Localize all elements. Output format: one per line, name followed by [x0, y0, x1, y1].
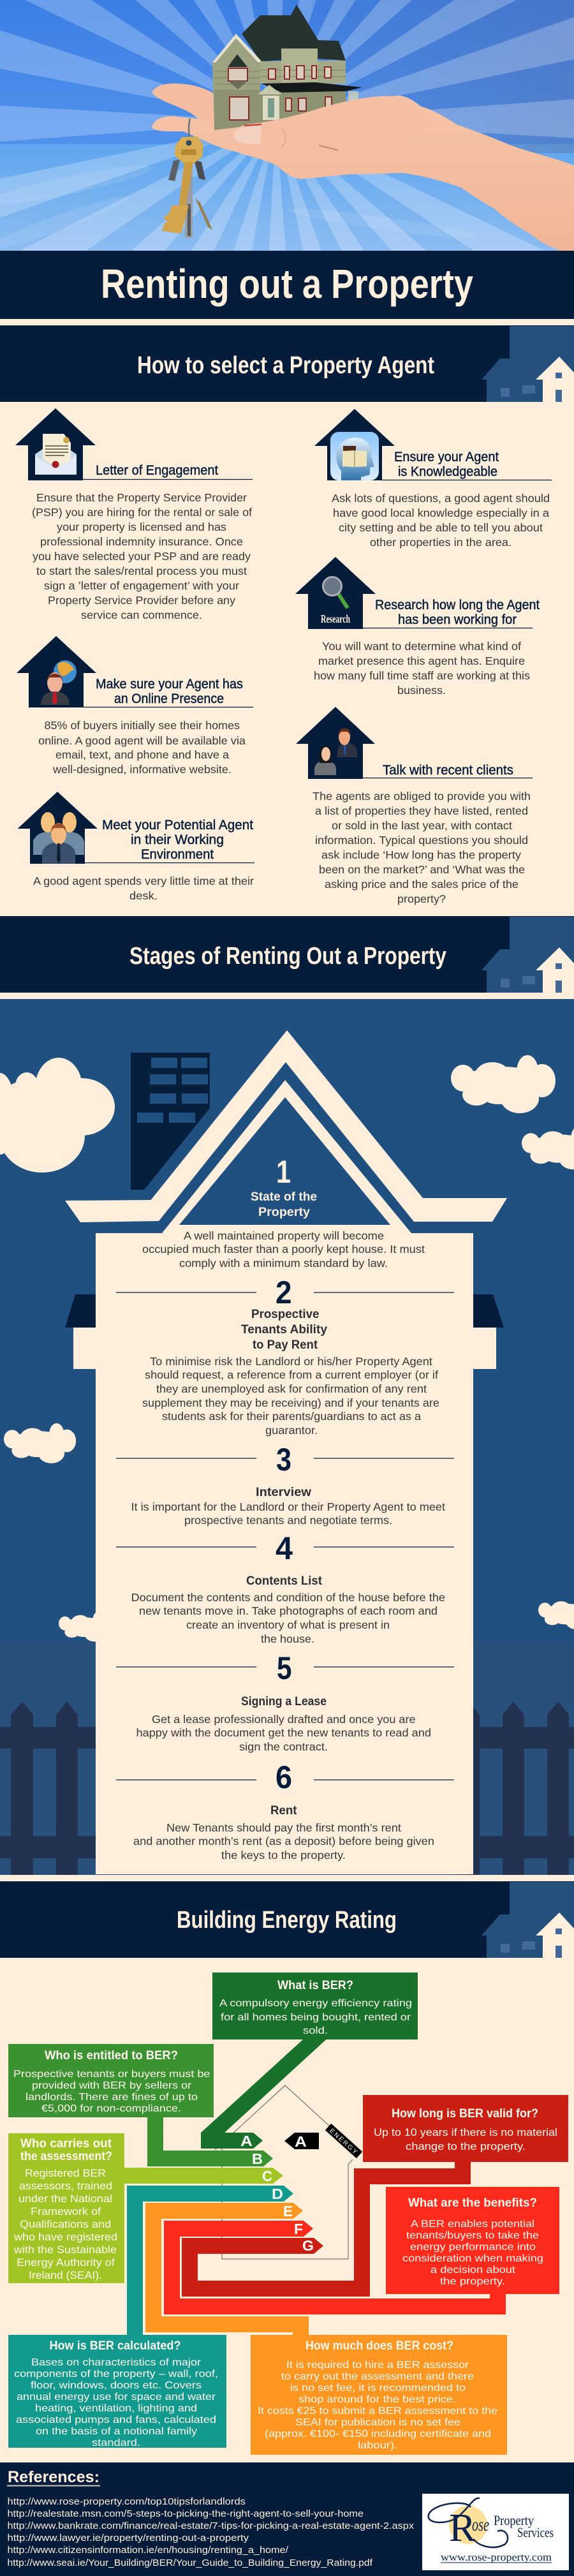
- heading: Research how long the Agent: [375, 598, 540, 612]
- text block: [314, 640, 530, 697]
- logo: Rose Property Services: ose: [472, 2514, 489, 2535]
- callout: how is BER calculated: components of the property – wall, roof,: [14, 2369, 218, 2380]
- text block: 85% of buyers initially see their homes: [45, 719, 240, 732]
- icon: three agents: [18, 792, 98, 864]
- band C: [124, 2168, 283, 2184]
- stage text: Get a lease professionally drafted and once you are: [152, 1713, 416, 1726]
- reference links: http://www.lawyer.ie/property/renting-out-a-property: [8, 2533, 249, 2543]
- icon: two clients: [296, 707, 375, 779]
- callout: how much does BER cost: SEAI for publication is no set fee: [295, 2417, 460, 2428]
- heading: Letter of Engagement: [96, 463, 218, 478]
- callout: what is BER: for all homes being bought, rented or: [221, 2012, 411, 2023]
- stage text: and another month’s rent (as a deposit) before being given: [133, 1835, 434, 1847]
- text block: sign a ’letter of engagement’ with your: [44, 579, 239, 592]
- stage 6: [116, 1759, 454, 1862]
- callout: how is BER calculated: annual energy use for space and water: [17, 2392, 216, 2402]
- band G: [182, 2162, 471, 2297]
- number: 5: [277, 1650, 292, 1686]
- callout: who carries out the assessment: with the Sustainable: [13, 2244, 117, 2256]
- stage heading: Property: [258, 1206, 310, 1219]
- icon: model house: [212, 4, 362, 130]
- heading: has been working for: [398, 612, 517, 627]
- stage text: To minimise risk the Landlord or his/her Property Agent: [150, 1355, 432, 1368]
- callout: who is entitled to BER: provided with BER by sellers or: [32, 2080, 192, 2091]
- stage text: prospective tenants and negotiate terms.: [184, 1514, 392, 1527]
- stage text: the keys to the property.: [221, 1849, 346, 1862]
- references heading: References:: [8, 2468, 99, 2486]
- black rating arrow: A: [295, 2133, 307, 2150]
- stage heading: Prospective: [251, 1308, 319, 1321]
- reference links: http://realestate.msn.com/5-steps-to-picking-the-right-agent-to-sell-your-home: [8, 2509, 364, 2519]
- stage text: New Tenants should pay the first month’s rent: [166, 1821, 401, 1834]
- panel: letter of engagement: [15, 408, 253, 621]
- callout: who is entitled to BER: €5,000 for non-compliance.: [41, 2103, 181, 2114]
- stage 2: [116, 1275, 454, 1437]
- number: 6: [276, 1759, 292, 1795]
- stage text: happy with the document get the new tenants to read and: [136, 1726, 431, 1739]
- background tower block: [131, 1053, 210, 1190]
- callout: what are the benefits: energy performance into: [410, 2242, 536, 2253]
- callout: who carries out the assessment: under the National: [18, 2193, 112, 2205]
- panel: ensure your agent is knowledgeable: [314, 409, 552, 549]
- panel: online presence: [17, 636, 253, 776]
- icon: bunch of keys: [162, 119, 212, 238]
- callout: who is entitled to BER: [8, 2044, 214, 2117]
- callout: how is BER calculated: Bases on characteristics of major: [31, 2357, 202, 2368]
- stage text: [142, 1229, 425, 1269]
- band D: D: [272, 2186, 283, 2202]
- reference links: http://www.rose-property.com/top10tipsforlandlords: [8, 2497, 246, 2507]
- heading: Meet your Potential Agent: [102, 818, 253, 833]
- callout: who is entitled to BER: Who is entitled to BER?: [45, 2049, 178, 2062]
- band F: [164, 2221, 506, 2314]
- text block: business.: [397, 684, 446, 697]
- stage heading: [251, 1190, 317, 1219]
- panel: references: [0, 2462, 574, 2576]
- fence: [0, 1701, 574, 1875]
- stage text: occupied much faster than a poorly kept house. It must: [142, 1243, 425, 1255]
- callout: who carries out the assessment: Energy Authority of: [17, 2256, 115, 2269]
- callout: how much does BER cost: to carry out the assessment and there: [281, 2371, 474, 2382]
- text block: service can commence.: [81, 609, 202, 621]
- heading: [382, 450, 552, 480]
- icon: hand: [152, 84, 574, 251]
- cloud: low left: [59, 1611, 113, 1641]
- callout: how is BER calculated: floor, windows, doors etc. Covers: [31, 2380, 202, 2391]
- stage text: the house.: [261, 1632, 314, 1645]
- band C: C: [262, 2168, 272, 2184]
- heading: Stages of Renting Out a Property: [129, 943, 446, 970]
- stage heading: Contents List: [246, 1574, 323, 1588]
- text block: [38, 719, 246, 776]
- logo: Rose Property Services: R: [449, 2506, 476, 2550]
- text block: desk.: [129, 889, 158, 902]
- scene background: [0, 999, 574, 1875]
- callout: what are the benefits: consideration when making: [402, 2253, 543, 2264]
- title banner: [0, 251, 574, 319]
- callout: how is BER calculated: on the basis of a notional family: [36, 2426, 197, 2437]
- icon: magnifying glass: [295, 557, 376, 629]
- stage text: guarantor.: [265, 1424, 318, 1437]
- text block: have good local knowledge especially in a: [333, 507, 549, 519]
- text block: property?: [397, 892, 446, 905]
- band D: [127, 2186, 293, 2335]
- house outline: [215, 2085, 353, 2259]
- callout: who carries out the assessment: Who carries out: [20, 2137, 112, 2150]
- section banner: building energy rating: [0, 1881, 574, 1958]
- text block: other properties in the area.: [370, 536, 511, 549]
- reference links: [8, 2497, 415, 2568]
- stage heading: Signing a Lease: [241, 1695, 327, 1708]
- icon: letter in envelope: [15, 408, 96, 480]
- reference links: http://www.citizensinformation.ie/en/housing/renting_a_home/: [8, 2545, 289, 2556]
- callout: what is BER: sold.: [303, 2025, 328, 2036]
- band A: A: [240, 2133, 253, 2149]
- section banner: stages of renting: [0, 916, 574, 993]
- band F: F: [294, 2221, 303, 2237]
- cloud: middle left: [4, 1423, 76, 1463]
- stage text: supplement they may be receiving) and if your tenants are: [142, 1396, 439, 1409]
- house roof: [65, 1030, 507, 1233]
- stage text: [136, 1713, 431, 1753]
- callout: how much does BER cost: shop around for the best price.: [298, 2394, 456, 2405]
- sky streaks: [0, 159, 478, 256]
- callout: how long is BER valid: Up to 10 years if there is no material: [374, 2126, 557, 2138]
- number: 2: [276, 1275, 292, 1310]
- energy tag: ENERGY: [328, 2128, 358, 2156]
- stage 4: [116, 1530, 454, 1645]
- panel: meet your potential agent: [18, 792, 254, 902]
- callout: what are the benefits: tenants/buyers to take the: [406, 2230, 539, 2241]
- callout: what is BER: A compulsory energy efficiency rating: [219, 1998, 412, 2009]
- callout: who carries out the assessment: Ireland (SEAI).: [29, 2269, 102, 2281]
- callout: how much does BER cost: labour).: [358, 2440, 397, 2451]
- text block: Ensure that the Property Service Provider: [36, 491, 247, 504]
- icon: house silhouette: [482, 326, 574, 402]
- heading: Environment: [141, 847, 214, 862]
- logo: Rose Property Services: Services: [517, 2524, 554, 2540]
- text block: or sold in the last year, with contact: [332, 819, 512, 832]
- stage text: create an inventory of what is present in: [186, 1618, 390, 1631]
- band B: [147, 2117, 273, 2167]
- logo: Rose Property Services: [422, 2494, 569, 2570]
- number: 3: [276, 1442, 291, 1477]
- heading: is Knowledgeable: [398, 464, 497, 479]
- callout: what is BER: What is BER?: [277, 1979, 353, 1992]
- text block: your property is licensed and has: [57, 521, 226, 533]
- panel: stages scene: [0, 999, 574, 1875]
- heading: in their Working: [131, 833, 224, 847]
- callout: who carries out the assessment: Qualifications and: [20, 2218, 111, 2230]
- callout: how much does BER cost: [251, 2335, 507, 2455]
- house cornice: [65, 1294, 504, 1369]
- callout: who carries out the assessment: the assessment?: [20, 2150, 112, 2163]
- stage text: It is important for the Landlord or their Property Agent to meet: [131, 1500, 445, 1513]
- callout: who carries out the assessment: who have registered: [13, 2231, 117, 2243]
- text block: [33, 875, 254, 902]
- callout: how much does BER cost: is no set fee, it is recommended to: [290, 2383, 466, 2394]
- panel: research how long the agent has been working: [295, 557, 540, 697]
- stage heading: Interview: [256, 1486, 311, 1499]
- text block: market presence this agent has. Enquire: [318, 655, 525, 667]
- icon: head with book: [314, 409, 395, 480]
- callout: who carries out the assessment: [8, 2133, 124, 2283]
- callout: what are the benefits: A BER enables potential: [411, 2219, 534, 2230]
- text block: You will want to determine what kind of: [322, 640, 521, 653]
- callout: how long is BER valid: change to the property.: [406, 2140, 526, 2152]
- text block: online. A good agent will be available via: [38, 734, 246, 747]
- callout: how much does BER cost: It costs €25 to submit a BER assessment to the: [258, 2406, 497, 2417]
- icon: house silhouette: [482, 917, 574, 993]
- callout: how long is BER valid: [363, 2095, 568, 2162]
- text block: [32, 491, 252, 621]
- text block: a list of properties they have listed, rented: [315, 804, 528, 817]
- cloud: low right: [538, 1597, 574, 1629]
- stage heading: [241, 1308, 327, 1352]
- stage text: [142, 1355, 439, 1437]
- band E: [145, 2203, 309, 2335]
- section banner: how to select a property agent: [0, 325, 574, 402]
- text block: ask include ‘How long has the property: [321, 848, 521, 861]
- stage text: students ask for their parents/guardians to act as a: [162, 1410, 421, 1423]
- text block: been on the market?’ and ‘What was the: [319, 863, 525, 876]
- cloud: large left: [0, 1058, 115, 1173]
- stage 5: [116, 1650, 454, 1753]
- sunburst rays: [0, 0, 574, 251]
- stage heading: Rent: [270, 1804, 297, 1817]
- number: 1: [276, 1154, 291, 1190]
- band A: [201, 2039, 327, 2149]
- sky background: [0, 0, 574, 251]
- heading: Talk with recent clients: [383, 763, 513, 778]
- callout: what is BER: [212, 1973, 418, 2039]
- stage heading: State of the: [251, 1190, 317, 1204]
- text block: [313, 790, 531, 905]
- band G: G: [302, 2237, 314, 2254]
- stage text: Document the contents and condition of the house before the: [131, 1591, 445, 1604]
- text block: email, text, and phone and have a: [55, 748, 229, 761]
- callout: who carries out the assessment: Framework of: [31, 2205, 101, 2217]
- text block: you have selected your PSP and are ready: [33, 550, 251, 563]
- logo: Rose Property Services: www.rose-property.com: [441, 2551, 552, 2563]
- callout: how is BER calculated: How is BER calculated?: [50, 2339, 181, 2353]
- stage text: A well maintained property will become: [184, 1229, 384, 1242]
- band B: B: [252, 2150, 263, 2167]
- callout: how much does BER cost: (approx. €100- €150 including certificate and: [265, 2429, 491, 2439]
- callout: who is entitled to BER: landlords. There are fines of up to: [26, 2092, 198, 2103]
- callout: how much does BER cost: How much does BER cost?: [305, 2339, 453, 2353]
- panel: talk with recent clients: [296, 707, 533, 905]
- icon label: Research: [321, 612, 350, 625]
- text block: A good agent spends very little time at their: [33, 875, 254, 887]
- text block: Property Service Provider before any: [48, 594, 235, 607]
- text block: [332, 492, 550, 549]
- stage text: new tenants move in. Take photographs of each room and: [139, 1604, 438, 1617]
- callout: how long is BER valid: How long is BER valid for?: [392, 2107, 538, 2121]
- reference links: http://www.seai.ie/Your_Building/BER/Your_Guide_to_Building_Energy_Rating.pdf: [8, 2558, 373, 2568]
- icon: agent with globe: [17, 636, 96, 707]
- hero illustration: hand holding house and keys: [0, 0, 574, 251]
- callout: how is BER calculated: heating, ventilation, lighting and: [35, 2403, 197, 2414]
- heading: Make sure your Agent has: [96, 677, 243, 692]
- heading: How to select a Property Agent: [137, 352, 434, 379]
- stage 1: [142, 1154, 425, 1269]
- callout: who carries out the assessment: Registered BER: [25, 2167, 106, 2179]
- black rating arrow: [284, 2133, 319, 2150]
- icon: thumb: [234, 96, 394, 151]
- logo: Rose Property Services: Property: [494, 2512, 534, 2528]
- callout: who carries out the assessment: assessors, trained: [19, 2180, 112, 2192]
- text block: well-designed, informative website.: [52, 763, 232, 776]
- callout: what are the benefits: a decision about: [430, 2265, 516, 2276]
- stage text: should request, a reference from a current employer (or if: [145, 1368, 438, 1381]
- reference links: http://www.bankrate.com/finance/real-estate/7-tips-for-picking-a-real-estate-agent-2.aspx: [8, 2521, 415, 2531]
- icon: house silhouette: [482, 1882, 574, 1958]
- callout: how is BER calculated: associated pumps and fans, calculated: [16, 2415, 216, 2425]
- chart: BER energy label: [124, 2039, 506, 2335]
- stage text: [133, 1821, 434, 1862]
- stage text: they are unemployed ask for confirmation of any rent: [156, 1382, 427, 1395]
- text block: Ask lots of questions, a good agent should: [332, 492, 550, 505]
- number: 4: [276, 1530, 293, 1566]
- text block: The agents are obliged to provide you with: [313, 790, 531, 803]
- callout: what are the benefits: the property.: [440, 2276, 505, 2287]
- stage text: comply with a minimum standard by law.: [179, 1257, 388, 1269]
- text block: asking price and the sales price of the: [325, 878, 519, 891]
- panel: stage text column: [96, 1233, 473, 1874]
- callout: what are the benefits: What are the benefits?: [408, 2196, 537, 2210]
- text block: how many full time staff are working at this: [314, 669, 530, 682]
- cloud: lower right: [522, 1126, 574, 1169]
- heading: an Online Presence: [114, 692, 224, 706]
- heading: Building Energy Rating: [177, 1907, 397, 1934]
- stage heading: to Pay Rent: [253, 1338, 318, 1352]
- stage heading: Tenants Ability: [241, 1323, 327, 1336]
- stage text: [131, 1591, 445, 1645]
- stage text: sign the contract.: [239, 1740, 328, 1753]
- text block: professional indemnity insurance. Once: [40, 535, 243, 548]
- text block: (PSP) you are hiring for the rental or sale of: [32, 506, 252, 519]
- callout: how much does BER cost: It is required to hire a BER assessor: [286, 2360, 469, 2371]
- heading: [85, 818, 254, 862]
- heading: [84, 677, 253, 707]
- text block: city setting and be able to tell you about: [339, 521, 543, 534]
- heading: [363, 598, 540, 628]
- text block: to start the sales/rental process you must: [36, 565, 247, 577]
- energy tag: [325, 2124, 362, 2158]
- text block: information. Typical questions you should: [315, 834, 528, 847]
- callout: who is entitled to BER: Prospective tenants or buyers must be: [13, 2069, 210, 2080]
- heading: Ensure your Agent: [394, 450, 499, 464]
- callout: what are the benefits: [386, 2187, 559, 2294]
- stage text: [131, 1500, 445, 1527]
- band E: E: [283, 2203, 293, 2219]
- stage 3: [116, 1442, 454, 1527]
- callout: how is BER calculated: standard.: [92, 2438, 140, 2448]
- title: Renting out a Property: [101, 261, 473, 307]
- callout: how is BER calculated: [8, 2335, 226, 2448]
- cloud: top right: [451, 1055, 556, 1113]
